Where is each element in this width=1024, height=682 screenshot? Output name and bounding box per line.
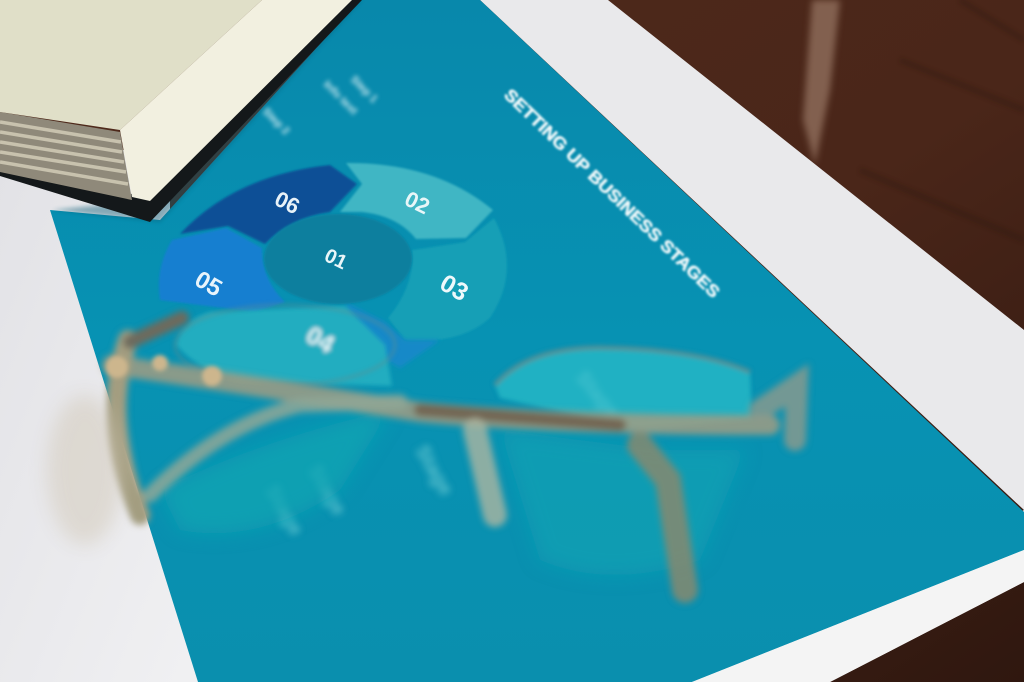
left lens rim: [175, 305, 395, 385]
blurred body text under the lenses: Stage: [571, 367, 623, 423]
segment 06: 06: [271, 186, 304, 219]
book top cover surface: [0, 0, 262, 130]
hinge studs: [106, 355, 222, 386]
frame front bar: [112, 318, 797, 590]
small blurred labels near the book: [260, 74, 380, 137]
segment 01 center: [264, 214, 412, 304]
white border of the printed sheet: [480, 0, 1024, 682]
segment 06: [180, 165, 357, 244]
lower lens areas: [160, 410, 745, 575]
segment 01 center: 01: [321, 245, 350, 274]
blurred body text under the lenses: Stage: [261, 482, 307, 540]
blurred body text under the lenses: [261, 367, 623, 540]
right lens: [495, 348, 752, 430]
segment 04: [176, 302, 440, 386]
book: [0, 0, 362, 222]
segment 03: [388, 218, 507, 341]
title: SETTING UP BUSINESS STAGES: [500, 85, 723, 302]
dark shadow of the book: [52, 0, 362, 222]
book cover: [0, 0, 362, 222]
white paper sheet under the book: [0, 150, 215, 682]
segment 02: [340, 163, 493, 239]
blurred body text under the lenses: Stage: [304, 462, 350, 520]
segment 02: 02: [401, 186, 434, 219]
book page block side: [0, 112, 132, 200]
white lower sheet edge: [692, 550, 1024, 682]
donut chart of six stages: [159, 163, 507, 386]
book page block front: [120, 0, 352, 201]
small blurred labels near the book: Step 2: [260, 106, 292, 137]
segment 04: 04: [301, 321, 339, 359]
segment 05: [159, 228, 285, 312]
frame shadow on paper: [47, 395, 123, 545]
small blurred labels near the book: Step 1: [348, 74, 380, 105]
eyeglasses: [47, 305, 797, 590]
blurred body text under the lenses: Stage: [411, 442, 457, 500]
small blurred labels near the book: Info text: [321, 79, 360, 118]
segment 05: 05: [190, 266, 227, 303]
segment 03: 03: [435, 269, 473, 307]
